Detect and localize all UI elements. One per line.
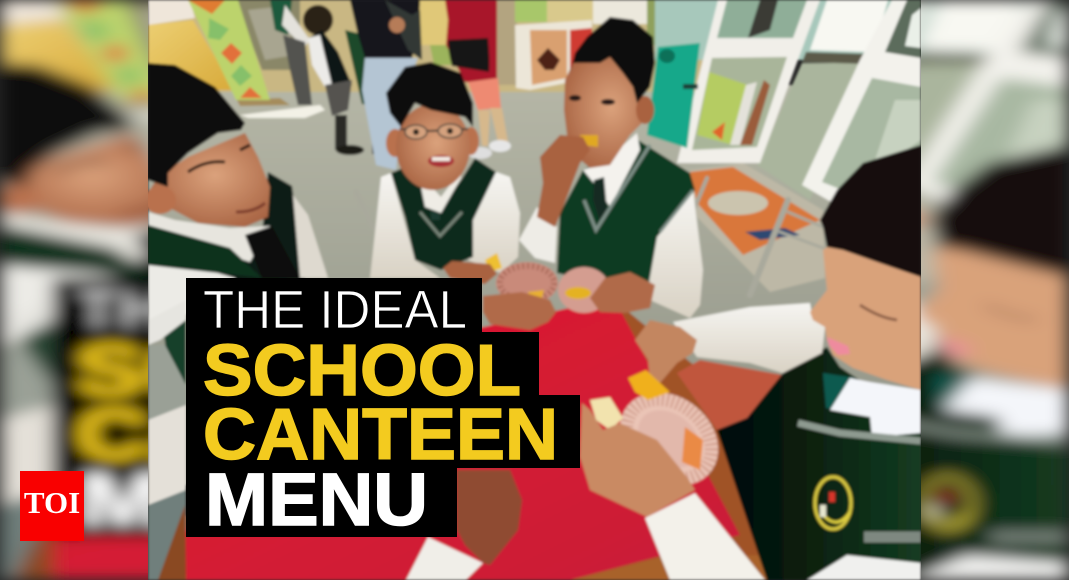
boy eating [519,17,703,318]
icon: school crest [815,477,851,529]
title block [186,278,580,541]
floor [148,85,921,485]
title line: CANTEEN: CANTEEN [203,395,558,475]
chair legs [695,174,956,296]
red table [148,300,783,580]
ice cream freezer [515,20,592,90]
glass and doors [655,0,921,210]
mosaic floor [690,163,825,292]
hand and plate in the foreground [580,320,765,580]
paper plates with snacks [485,253,610,313]
people standing in the background [270,0,511,170]
hands at the table [406,261,655,580]
title line: THE IDEAL: THE IDEAL [203,280,467,340]
decorated pillar [188,0,270,100]
canteen back wall [148,0,708,118]
boy with glasses [370,62,520,278]
large boy in front right [673,145,921,580]
boy on the left [144,63,328,580]
teal dustbin [647,43,700,148]
blurred right side panel [921,0,1069,580]
TOI logo [20,471,84,541]
central photo with title [144,0,921,580]
title line: MENU: MENU [205,458,428,541]
blurred left side panel [0,0,148,580]
title background [186,278,580,537]
title line: SCHOOL: SCHOOL [203,331,521,411]
TOI logo: TOI [24,485,80,520]
